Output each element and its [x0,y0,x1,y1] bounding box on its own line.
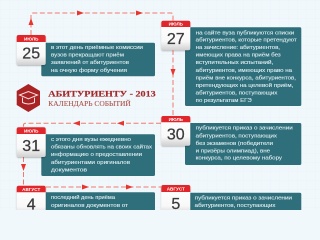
panel: 27 July text: претендующих на целевой приём, [196,82,294,89]
panel: 25 July text: в этот день приёмные комиссии [51,45,143,51]
calendar icon: 27 July [161,21,190,50]
panel: 31 July text [41,134,155,176]
calendar icon: 27 July: 27 [167,31,185,48]
panel: 25 July text: на очную форму обучения [51,68,127,74]
panel: 4 August text: оригиналов документов от [51,203,128,209]
panel: 5 August text: публикуется приказ о зачислении [195,195,292,201]
calendar icon: 5 August: АВГУСТ [167,186,185,191]
subtitle: КАЛЕНДАРЬ СОБЫТИЙ [48,99,131,108]
dashed arrow: connector lines between dates [24,13,173,187]
panel: 31 July text: абитуриентами оригиналов [51,160,130,166]
panel: 30 July text: абитуриентов, поступающих [196,134,277,140]
panel: 25 July text: заявлений от абитуриентов [51,59,129,66]
panel: 27 July text: абитуриентов, имеющих право на [196,68,293,74]
panel: 31 July text: обязаны обновлять на своих сайтах [51,144,152,151]
logo: graduation cap hexagon [17,84,40,112]
panel: 5 August text: абитуриентов, поступающих [195,203,275,209]
panel: 25 July text [41,43,155,76]
panel: 30 July text: публикуется приказ о зачислении [196,126,293,132]
panel: 4 August text [41,192,155,222]
panel: 4 August text: последний день приёма [51,194,116,201]
calendar icon: 30 July: ИЮЛЬ [169,117,184,122]
calendar icon: 31 July: 31 [22,138,40,155]
panel: 27 July text: вступительных испытаний, [196,59,274,66]
calendar icon: 30 July [161,116,190,146]
calendar icon: 25 July: ИЮЛЬ [24,36,39,41]
panel: 27 July text: имеющих права на приём без [196,52,281,58]
panel: 25 July text: вузов прекращают приём [51,52,124,58]
calendar icon: 4 August [17,186,46,216]
arrowheads [21,10,176,190]
panel: 31 July text: информацию о предоставлении [51,152,142,158]
panel: 30 July text [185,123,301,165]
calendar icon: 30 July: 30 [167,126,185,144]
panel: 27 July text: абитуриентов, поступающих [196,90,277,96]
panel: 27 July text: по результатам ЕГЭ [196,98,252,104]
calendar icon: 4 August: АВГУСТ [22,187,40,192]
calendar icon: 27 July: ИЮЛЬ [169,22,184,27]
panel: 31 July text: документов [51,168,87,174]
panel: 5 August text [185,193,301,223]
calendar icon: 25 July [17,35,46,65]
calendar icon: 31 July [17,127,46,157]
panel: 27 July text: абитуриентов, которые претендуют [196,38,297,44]
panel: 27 July text [185,27,301,106]
calendar icon: 5 August [161,185,190,215]
panel: 30 July text: и призёры олимпиад), вне [196,148,271,154]
panel: 30 July text: конкурса, по целевому набору [196,156,282,162]
title: АБИТУРИЕНТУ - 2013 [48,90,156,99]
panel: 30 July text: без экзаменов (победители [196,141,273,147]
calendar icon: 25 July: 25 [22,46,40,62]
panel: 27 July text: на сайте вуза публикуются списки [196,30,294,36]
panel: 31 July text: с этого дня вузы ежедневно [51,137,132,143]
calendar icon: 31 July: ИЮЛЬ [24,128,39,133]
panel: 27 July text: приём вне конкурса, абитуриентов, [196,76,296,82]
panel: 27 July text: на зачисление: абитуриентов, [196,45,280,51]
